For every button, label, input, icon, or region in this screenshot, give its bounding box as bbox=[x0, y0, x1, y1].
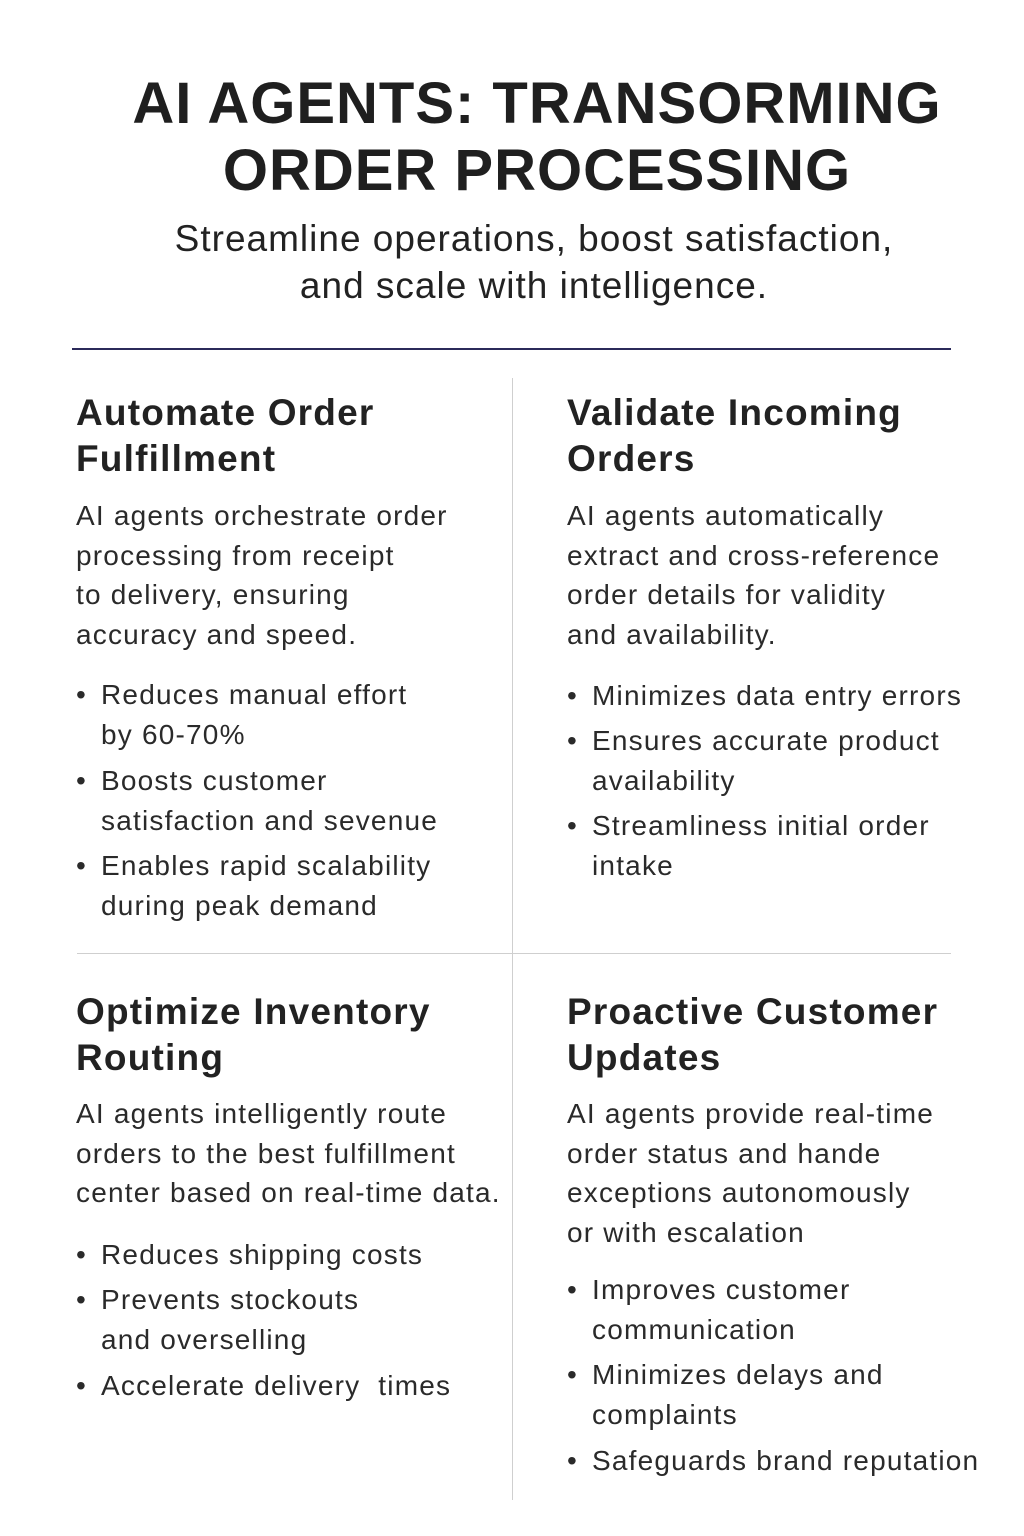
heading: Optimize Inventory bbox=[76, 991, 431, 1032]
bullet list: Prevents stockouts bbox=[101, 1284, 359, 1315]
title: AI AGENTS: TRANSORMING bbox=[132, 71, 942, 136]
description bbox=[76, 500, 448, 650]
heading: Automate Order bbox=[76, 392, 374, 433]
description: and availability. bbox=[567, 619, 777, 650]
heading: Orders bbox=[567, 438, 696, 479]
description: AI agents provide real-time bbox=[567, 1098, 934, 1129]
bullet list: Improves customer bbox=[592, 1274, 850, 1305]
description: processing from receipt bbox=[76, 540, 395, 571]
bullet list bbox=[77, 1239, 451, 1401]
bullet list: Ensures accurate product bbox=[592, 725, 940, 756]
panel: optimize inventory routing bbox=[76, 991, 501, 1401]
description: order status and hande bbox=[567, 1138, 881, 1169]
description: AI agents intelligently route bbox=[76, 1098, 447, 1129]
panel: proactive customer updates bbox=[567, 991, 979, 1476]
bullet list: Reduces manual effort bbox=[101, 679, 407, 710]
bullet list: by 60-70% bbox=[101, 719, 246, 750]
description: accuracy and speed. bbox=[76, 619, 357, 650]
heading bbox=[567, 392, 902, 479]
bullet list: Accelerate delivery times bbox=[101, 1370, 451, 1401]
bullet list: Reduces shipping costs bbox=[101, 1239, 423, 1270]
heading bbox=[76, 991, 431, 1078]
description: or with escalation bbox=[567, 1217, 805, 1248]
description bbox=[76, 1098, 501, 1208]
bullet list: Enables rapid scalability bbox=[101, 850, 431, 881]
heading: Routing bbox=[76, 1037, 224, 1078]
heading: Updates bbox=[567, 1037, 721, 1078]
bullet list bbox=[568, 680, 962, 881]
bullet list: Safeguards brand reputation bbox=[592, 1445, 979, 1476]
description: exceptions autonomously bbox=[567, 1177, 911, 1208]
description: center based on real-time data. bbox=[76, 1177, 501, 1208]
description: extract and cross-reference bbox=[567, 540, 940, 571]
bullet list: and overselling bbox=[101, 1324, 307, 1355]
heading: Validate Incoming bbox=[567, 392, 902, 433]
bullet list bbox=[77, 679, 438, 921]
bullet list: complaints bbox=[592, 1399, 738, 1430]
bullet list bbox=[568, 1274, 979, 1476]
heading bbox=[567, 991, 938, 1078]
description: AI agents automatically bbox=[567, 500, 884, 531]
description: order details for validity bbox=[567, 579, 886, 610]
description: orders to the best fulfillment bbox=[76, 1138, 456, 1169]
bullet list: Streamliness initial order bbox=[592, 810, 930, 841]
bullet list: availability bbox=[592, 765, 736, 796]
bullet list: Boosts customer bbox=[101, 765, 328, 796]
panel: automate order fulfillment bbox=[76, 392, 448, 921]
heading bbox=[76, 392, 374, 479]
bullet list: intake bbox=[592, 850, 674, 881]
heading: Fulfillment bbox=[76, 438, 276, 479]
title: ORDER PROCESSING bbox=[223, 138, 851, 203]
bullet list: during peak demand bbox=[101, 890, 378, 921]
bullet list: satisfaction and sevenue bbox=[101, 805, 438, 836]
bullet list: Minimizes delays and bbox=[592, 1359, 884, 1390]
description bbox=[567, 1098, 934, 1248]
title bbox=[132, 71, 942, 203]
panel: validate incoming orders bbox=[567, 392, 962, 881]
subtitle bbox=[175, 218, 893, 306]
description bbox=[567, 500, 940, 650]
bullet list: communication bbox=[592, 1314, 796, 1345]
heading: Proactive Customer bbox=[567, 991, 938, 1032]
description: AI agents orchestrate order bbox=[76, 500, 448, 531]
subtitle: Streamline operations, boost satisfaction, bbox=[175, 218, 893, 259]
subtitle: and scale with intelligence. bbox=[300, 265, 768, 306]
description: to delivery, ensuring bbox=[76, 579, 350, 610]
bullet list: Minimizes data entry errors bbox=[592, 680, 962, 711]
